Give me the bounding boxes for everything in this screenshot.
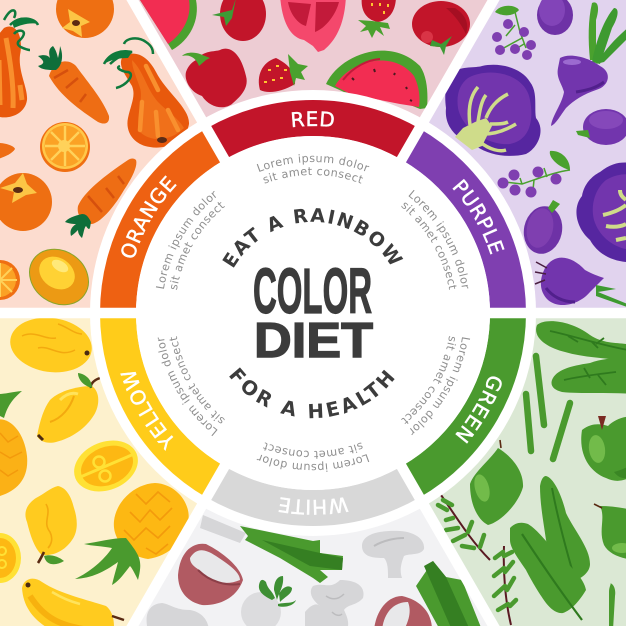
icon: persimmon top — [56, 0, 114, 38]
icon: plum lower — [519, 200, 567, 257]
panel: green foods — [313, 313, 626, 626]
icon: lime — [470, 440, 523, 525]
icon: pomegranate — [280, 0, 346, 52]
panel: yellow foods — [0, 313, 313, 626]
icon: tomato right — [412, 1, 470, 55]
label: orange: ORANGE — [121, 175, 177, 258]
icon: melon oval — [7, 313, 95, 377]
icon: asparagus bottom — [609, 583, 615, 626]
icon: onion — [535, 258, 626, 308]
icon: rosemary two — [494, 546, 516, 625]
text block: green note: Lorem ipsum dolor — [410, 337, 470, 435]
text block: yellow note: Lorem ipsum dolor — [158, 338, 218, 436]
label: green: GREEN — [455, 376, 502, 444]
text block: orange note: Lorem ipsum dolor — [156, 191, 216, 289]
icon: lemon half — [66, 431, 146, 501]
text block: white note: sit amet consect — [263, 442, 363, 459]
title: diet: DIET — [254, 314, 373, 368]
icon: leek — [240, 526, 343, 583]
icon: apple — [581, 416, 626, 481]
text block: white note — [256, 442, 370, 472]
text block: red note: sit amet consect — [263, 167, 363, 184]
text block: purple note: sit amet consect — [401, 202, 456, 290]
icon: strawberry left — [259, 54, 308, 92]
icon: ginger — [310, 580, 364, 626]
icon: coconut right — [374, 596, 432, 626]
panel: red foods — [132, 0, 494, 313]
heading: for a health: FOR A HEALTH — [229, 367, 395, 418]
icon: squash right — [104, 38, 189, 148]
icon: mango half — [19, 238, 99, 316]
title: color: COLOR — [253, 255, 372, 327]
icon: banana — [22, 579, 124, 626]
text block: red note — [256, 154, 370, 184]
text block: green note: sit amet consect — [401, 336, 456, 424]
icon: leek right — [416, 561, 482, 626]
icon: stone blob — [147, 603, 209, 626]
icon: carrot two — [65, 158, 136, 238]
text block: orange note: sit amet consect — [170, 202, 225, 290]
icon: berries top — [492, 6, 536, 60]
icon: turnip — [241, 576, 296, 626]
icon: beet — [551, 2, 626, 126]
icon: berries lower — [498, 151, 570, 198]
text block: yellow note: sit amet consect — [170, 336, 225, 424]
text block: white note: Lorem ipsum dolor — [256, 454, 370, 472]
icon: watermelon left — [140, 0, 197, 50]
panel: orange foods — [0, 0, 313, 316]
icon: spinach leaf lower — [510, 523, 586, 620]
icon: rosemary one — [438, 495, 490, 560]
icon: spinach leaf upright — [540, 476, 590, 590]
icon: pear lower — [25, 486, 77, 564]
label: purple: PURPLE — [452, 178, 504, 254]
icon: pear upper — [37, 373, 100, 443]
icon: turnip right — [305, 604, 320, 626]
icon: carrot one — [38, 46, 109, 124]
icon: lime right — [594, 504, 626, 560]
label: white: WHITE — [278, 497, 348, 515]
icon: spinach top — [536, 321, 626, 362]
icon: asparagus set — [526, 356, 570, 459]
text block: red note: Lorem ipsum dolor — [256, 154, 370, 172]
label: yellow: YELLOW — [120, 372, 174, 451]
icon: cabbage left — [445, 65, 541, 156]
center disc — [136, 136, 490, 490]
icon: persimmon mid — [0, 173, 52, 231]
band segments — [118, 118, 508, 508]
icon: coconut — [178, 544, 243, 605]
white ring — [90, 90, 536, 536]
icon: cabbage right — [576, 162, 626, 262]
icon: plum right — [576, 109, 626, 145]
icon: tomato top — [212, 0, 266, 41]
icon: orange slice — [40, 122, 90, 172]
icon: pineapple left — [0, 391, 27, 496]
icon: lemon half left — [0, 533, 21, 583]
icon: mushroom — [362, 531, 424, 578]
icon: spinach lower — [551, 356, 626, 394]
icon: pineapple — [75, 483, 189, 585]
label: red: RED — [292, 111, 334, 128]
icon: strawberry right — [358, 0, 396, 38]
icon: plum top — [537, 0, 573, 35]
heading: eat a rainbow: EAT A RAINBOW — [222, 208, 404, 268]
icon: squash left — [0, 10, 38, 117]
panel: purple foods — [313, 0, 626, 313]
text block: purple note: Lorem ipsum dolor — [408, 190, 468, 288]
icon: orange slice piece — [0, 143, 15, 159]
icon: orange slice lower — [0, 260, 20, 300]
icon: pepper — [182, 49, 247, 107]
panel: white foods — [132, 313, 494, 626]
icon: watermelon bottom — [326, 51, 427, 109]
icon: gray leek stalk — [200, 515, 246, 543]
